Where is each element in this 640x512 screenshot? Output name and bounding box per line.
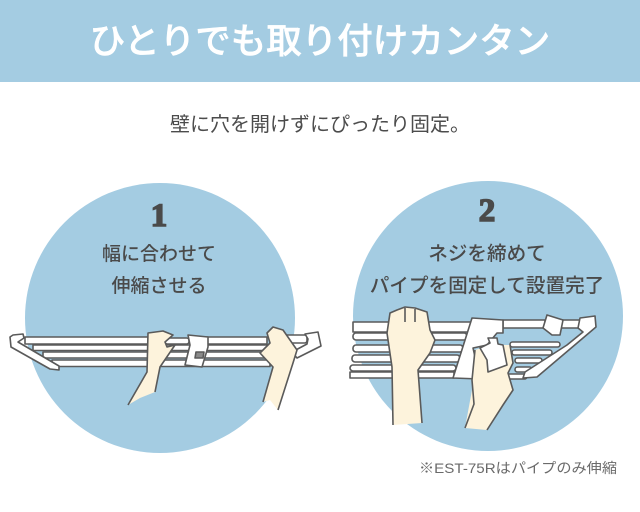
step 2 drying rack	[350, 315, 596, 379]
subtitle: 壁に穴を開けずにぴったり固定。	[170, 113, 470, 136]
step 2 circle	[353, 181, 623, 451]
step 2 text: パイプを固定して設置完了	[370, 275, 604, 297]
step 1 text: 伸縮させる	[111, 275, 207, 297]
step 2 right hand	[465, 345, 513, 430]
step 1 circle	[25, 183, 295, 453]
title banner	[0, 0, 640, 82]
panel: step 2	[350, 181, 623, 451]
step 1 right hand	[260, 327, 297, 410]
step 2 text: ネジを締めて	[428, 243, 546, 265]
step 1 number: 1	[151, 198, 167, 234]
step 1 left hand	[128, 331, 175, 405]
step 2 number: 2	[479, 193, 495, 229]
footnote: ※EST-75Rはパイプのみ伸縮	[419, 460, 617, 476]
step 1 text: 幅に合わせて	[102, 243, 216, 265]
title: ひとりでも取り付けカンタン	[90, 21, 550, 61]
panel: step 1	[10, 183, 321, 453]
step 2 left hand	[387, 307, 435, 425]
step 2 screw knob	[480, 338, 507, 372]
step 1 drying rack	[10, 332, 321, 370]
